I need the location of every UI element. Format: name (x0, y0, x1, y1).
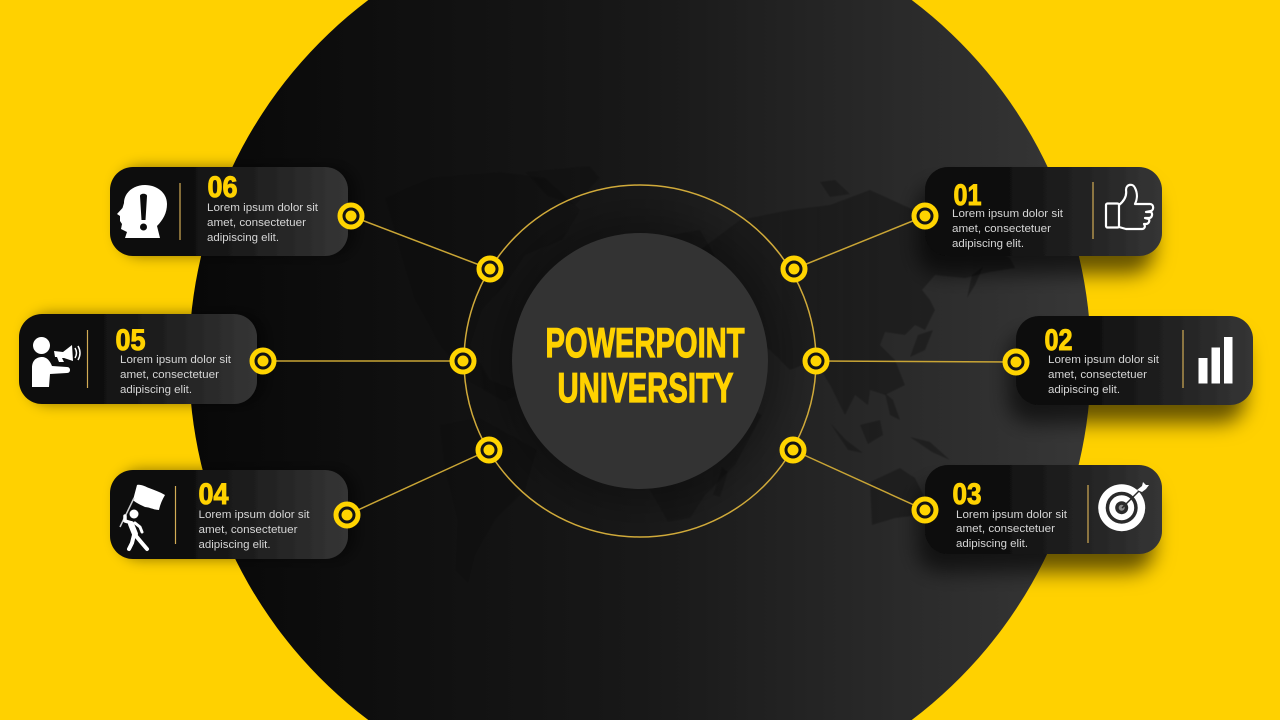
icon: head with exclamation (117, 185, 167, 238)
outer ring (464, 185, 816, 537)
panel: card 01: adipiscing elit. (952, 238, 1024, 250)
icon: thumbs up (1106, 185, 1153, 229)
world map (385, 166, 1015, 583)
panel: card 02 (1016, 316, 1253, 405)
panel: card 02: adipiscing elit. (1048, 384, 1120, 396)
panel: card 04: 04 (198, 478, 229, 511)
icon: bar chart (1198, 337, 1232, 384)
panel: card 01: Lorem ipsum dolor sit (952, 208, 1063, 220)
panel: card 03 (925, 465, 1162, 554)
panel: card 03: Lorem ipsum dolor sit (956, 509, 1067, 521)
panel: card 03: 03 (952, 478, 982, 511)
panel: card 01: 01 (954, 179, 982, 212)
panel: card 04: adipiscing elit. (198, 539, 270, 551)
panel: card 05: Lorem ipsum dolor sit (120, 354, 231, 366)
title: UNIVERSITY (558, 364, 734, 411)
title: POWERPOINT (546, 319, 745, 366)
panel: card 01 (925, 167, 1162, 256)
panel: card 02: 02 (1044, 324, 1072, 357)
large dark circle (189, 0, 1091, 720)
panel: card 04 (110, 470, 348, 559)
panel: card 06 (110, 167, 348, 256)
panel: card 05: amet, consectetuer (120, 369, 219, 381)
panel: card 03: amet, consectetuer (956, 523, 1055, 535)
icon: person with flag (120, 485, 165, 549)
center halo (495, 216, 785, 506)
panel: card 06: 06 (208, 171, 238, 204)
icon: person with megaphone (32, 337, 80, 387)
title (546, 319, 745, 411)
connector lines (263, 216, 1016, 515)
panel: card 04: amet, consectetuer (198, 524, 298, 536)
icon: target with arrow (1098, 482, 1149, 531)
panel: card 03: adipiscing elit. (956, 538, 1028, 550)
panel: card 05: adipiscing elit. (120, 384, 192, 396)
panel: card 02: amet, consectetuer (1048, 369, 1147, 381)
panel: card 05: 05 (116, 324, 146, 357)
panel: card 01: amet, consectetuer (952, 223, 1051, 235)
panel: card 05 (19, 314, 257, 404)
panel: card 06: adipiscing elit. (207, 232, 279, 244)
panel: card 06: Lorem ipsum dolor sit (207, 202, 318, 214)
center circle (512, 233, 768, 489)
panel: card 06: amet, consectetuer (207, 217, 306, 229)
node markers (252, 205, 1027, 526)
panel: card 02: Lorem ipsum dolor sit (1048, 354, 1159, 366)
panel: card 04: Lorem ipsum dolor sit (198, 509, 310, 521)
